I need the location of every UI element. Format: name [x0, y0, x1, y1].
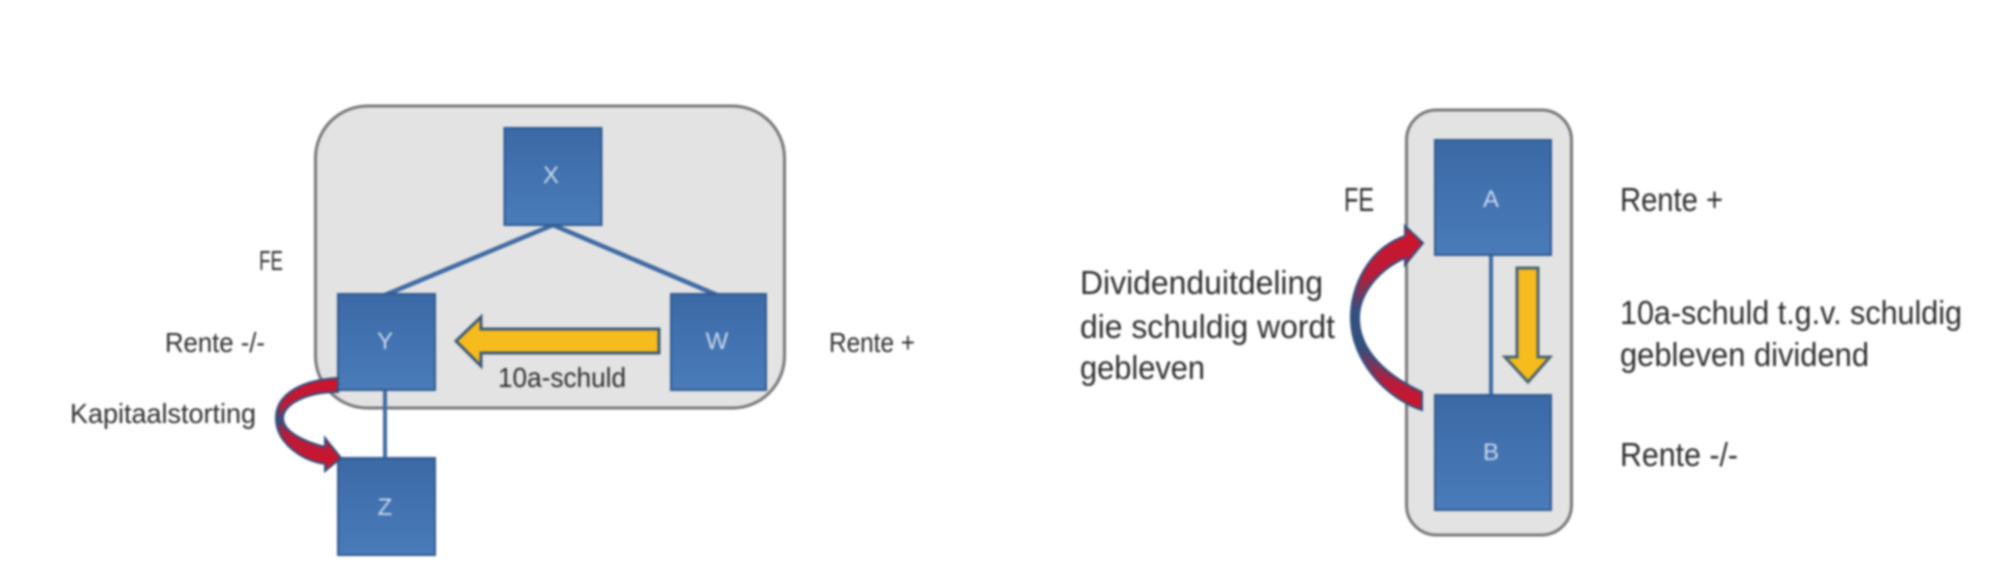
diagram: left fiscal unity structure	[70, 106, 915, 555]
entity box Z: Z	[378, 494, 392, 521]
label: Rente -/- left: Rente -/-	[165, 327, 265, 358]
label: Dividenduitdeling die schuldig wordt gebleven: Dividenduitdeling	[1080, 264, 1323, 301]
entity box A	[1435, 140, 1551, 255]
label: Rente -/- right: Rente -/-	[1620, 436, 1738, 473]
entity box A: A	[1483, 186, 1499, 213]
entity box X	[504, 128, 602, 225]
panel: FE group right	[1406, 110, 1572, 535]
ownership lines X to Y and W	[385, 225, 717, 458]
panel: FE group left	[316, 106, 784, 408]
arrow: 10a-schuld yellow	[456, 317, 659, 366]
label: 10a-schuld t.g.v. schuldig gebleven dividend	[1620, 294, 1962, 373]
entity box Y: Y	[377, 328, 393, 355]
arrow: Dividenduitdeling red curved	[1351, 226, 1423, 410]
label: Kapitaalstorting: Kapitaalstorting	[70, 398, 256, 429]
entity box Z	[338, 458, 435, 555]
diagram: right fiscal unity structure	[1080, 110, 1962, 535]
label: 10a-schuld: 10a-schuld	[498, 362, 626, 393]
arrow: Kapitaalstorting red curved	[276, 378, 341, 471]
entity box Y	[338, 294, 435, 390]
label: Rente + right: Rente +	[1620, 181, 1723, 218]
entity box X: X	[543, 162, 559, 189]
entity box W: W	[706, 328, 729, 355]
entity box B	[1435, 395, 1551, 510]
entity box W	[671, 294, 766, 390]
ownership line A to B	[1489, 255, 1493, 394]
label: Dividenduitdeling die schuldig wordt gebleven	[1080, 264, 1335, 386]
label: Rente + left: Rente +	[829, 327, 915, 358]
label: Dividenduitdeling die schuldig wordt gebleven: die schuldig wordt	[1080, 308, 1335, 345]
label: FE left: FE	[259, 245, 283, 276]
label: 10a-schuld t.g.v. schuldig gebleven dividend: gebleven dividend	[1620, 336, 1869, 373]
entity box B: B	[1483, 439, 1499, 466]
label: Dividenduitdeling die schuldig wordt gebleven: gebleven	[1080, 349, 1205, 386]
label: FE right: FE	[1344, 181, 1374, 218]
arrow: yellow down	[1505, 268, 1550, 382]
label: 10a-schuld t.g.v. schuldig gebleven dividend: 10a-schuld t.g.v. schuldig	[1620, 294, 1962, 331]
